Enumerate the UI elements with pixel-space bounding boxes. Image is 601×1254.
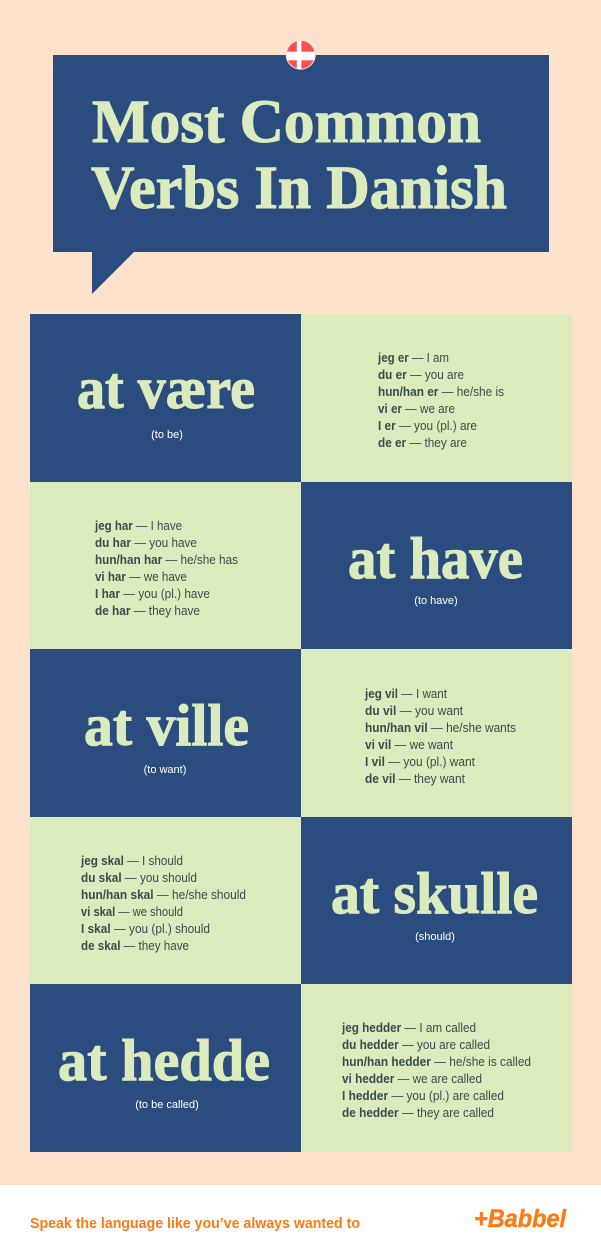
panel: at have conjugations: I har — you (pl.) have — [95, 587, 210, 601]
panel: at hedde conjugations: I hedder — you (pl.) are called — [342, 1089, 504, 1103]
panel: at hedde conjugations: jeg hedder — I am called — [341, 1021, 476, 1035]
panel: at skulle: at skulle — [331, 860, 538, 926]
panel: at ville conjugations: du vil — you want — [365, 704, 463, 718]
footer — [0, 1185, 601, 1254]
title — [91, 89, 507, 222]
panel: at have — [301, 482, 572, 649]
panel: at ville conjugations: I vil — you (pl.) want — [365, 755, 475, 769]
panel: at have: at have — [348, 525, 523, 591]
panel: at skulle conjugations: de skal — they have — [81, 939, 189, 953]
panel: at være conjugations: jeg er — I am — [377, 351, 449, 365]
panel: at ville conjugations — [301, 649, 572, 817]
panel: at hedde conjugations: de hedder — they are called — [342, 1106, 494, 1120]
panel: at være conjugations: de er — they are — [378, 436, 467, 450]
panel: at skulle: (should) — [415, 931, 455, 943]
panel: at ville conjugations: vi vil — we want — [365, 738, 453, 752]
panel: at skulle conjugations: vi skal — we should — [81, 905, 183, 919]
panel: at skulle conjugations: I skal — you (pl.) should — [81, 922, 210, 936]
panel: at være conjugations: I er — you (pl.) are — [378, 419, 477, 433]
title: Verbs In Danish — [91, 155, 507, 222]
panel: at skulle — [301, 817, 572, 984]
panel: at skulle conjugations: jeg skal — I should — [80, 854, 183, 868]
panel: at være conjugations: vi er — we are — [378, 402, 455, 416]
panel: at have conjugations — [30, 482, 301, 649]
panel: at ville: at ville — [84, 692, 249, 758]
panel: at have conjugations: jeg har — I have — [94, 519, 182, 533]
panel: at være conjugations: du er — you are — [378, 368, 464, 382]
panel: at have conjugations: vi har — we have — [95, 570, 187, 584]
panel: at hedde conjugations: hun/han hedder — he/she is called — [342, 1055, 531, 1069]
panel: at have conjugations: du har — you have — [95, 536, 197, 550]
logo: Babbel: +Babbel — [474, 1205, 567, 1233]
panel: at hedde conjugations: vi hedder — we are called — [342, 1072, 482, 1086]
tagline: Speak the language like you’ve always wanted to — [30, 1216, 360, 1232]
panel: at have conjugations: de har — they have — [95, 604, 200, 618]
panel: at være — [30, 314, 301, 482]
panel: at skulle conjugations: du skal — you should — [81, 871, 197, 885]
panel: at være: (to be) — [151, 429, 183, 441]
title speech bubble — [53, 55, 549, 294]
panel: at ville: (to want) — [144, 764, 186, 776]
panel: at skulle conjugations — [30, 817, 301, 984]
panel: at ville — [30, 649, 301, 817]
panel: at hedde conjugations: du hedder — you are called — [342, 1038, 490, 1052]
panel: at ville conjugations: jeg vil — I want — [364, 687, 447, 701]
title: Most Common — [92, 89, 481, 156]
panel: at have conjugations: hun/han har — he/she has — [95, 553, 238, 567]
panel: at ville conjugations: hun/han vil — he/she wants — [365, 721, 516, 735]
icon: Danish flag — [286, 40, 316, 70]
panel: at være conjugations: hun/han er — he/she is — [378, 385, 504, 399]
panel: at hedde: (to be called) — [135, 1099, 199, 1111]
panel: at være conjugations — [301, 314, 572, 482]
panel: at hedde: at hedde — [58, 1027, 270, 1093]
panel: at have: (to have) — [414, 595, 458, 607]
panel: at ville conjugations: de vil — they want — [365, 772, 465, 786]
panel: at være: at være — [77, 355, 255, 421]
panel: at hedde — [30, 984, 301, 1152]
panel: at hedde conjugations — [301, 984, 572, 1152]
panel: at skulle conjugations: hun/han skal — he/she should — [81, 888, 246, 902]
